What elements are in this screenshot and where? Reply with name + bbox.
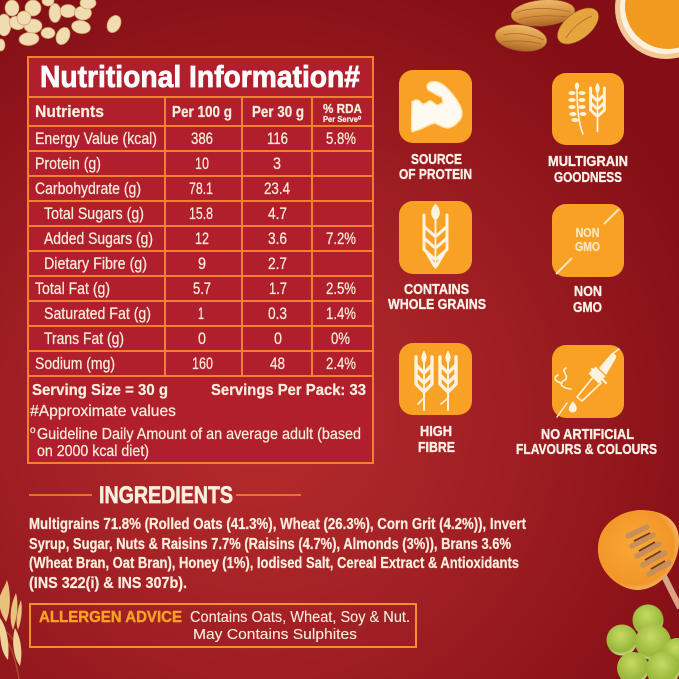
badge: non gmo: GMO: [573, 300, 602, 316]
table rows: 2.5%: [326, 280, 356, 298]
table rows: 78.1: [189, 180, 213, 198]
column headers: [35, 101, 363, 124]
table rows: 0.3: [268, 305, 287, 323]
badge: source of protein: [399, 70, 472, 183]
icon: non gmo mark: [556, 209, 619, 274]
column headers: Per Serve⁰: [323, 115, 362, 124]
table rows: 1.4%: [326, 305, 356, 323]
honey jar, top right: [615, 0, 679, 59]
icon: flexed arm: [412, 82, 462, 132]
column headers: Per 100 g: [172, 104, 232, 121]
allergen heading: ALLERGEN ADVICE: [39, 609, 182, 626]
table rows: Protein (g): [35, 155, 101, 173]
table rows: 5.8%: [326, 130, 356, 148]
table footnotes: Serving Size = 30 g: [32, 382, 168, 399]
table rows: 10: [195, 155, 209, 173]
ingredients text: (INS 322(i) & INS 307b).: [29, 575, 187, 592]
ingredients text: Syrup, Sugar, Nuts & Raisins 7.7% (Raisins (4.7%), Almonds (3%)), Brans 3.6%: [29, 536, 511, 553]
nutrition table: [28, 57, 373, 463]
table rows: 5.7: [193, 280, 211, 298]
table rows: Energy Value (kcal): [35, 130, 157, 148]
ingredients text: (Wheat Bran, Oat Bran), Honey (1%), Iodised Salt, Cereal Extract & Antioxidants: [29, 555, 519, 572]
icon: non gmo mark: GMO: [575, 240, 600, 254]
table footnotes: Servings Per Pack: 33: [211, 382, 366, 399]
badge: source of protein: OF PROTEIN: [399, 167, 472, 183]
table rows: 9: [198, 255, 206, 273]
table rows: 0: [198, 330, 206, 348]
oats pile, top left: [0, 0, 124, 51]
badge: non gmo: [552, 204, 624, 316]
table rows: 386: [191, 130, 213, 148]
badge: high fibre: [399, 343, 472, 456]
label: MULTIGRAIN: [548, 154, 628, 170]
table rows: 2.4%: [326, 355, 356, 373]
badge: multigrain goodness: GOODNESS: [554, 170, 622, 186]
table rows: 12: [195, 230, 209, 248]
dipper head: [628, 527, 669, 574]
label: NO ARTIFICIAL: [541, 427, 634, 443]
table rows: Carbohydrate (g): [35, 180, 141, 198]
column headers: % RDA: [323, 101, 363, 116]
grapes, bottom right: [606, 604, 679, 679]
allergen advice box: [30, 604, 416, 647]
table rows: Added Sugars (g): [44, 230, 153, 248]
label: NON: [574, 284, 602, 300]
table rows: 23.4: [264, 180, 290, 198]
table footnotes: Guideline Daily Amount of an average adult (based: [37, 426, 361, 443]
honey dollop with dipper: [598, 510, 679, 608]
icon: non gmo mark: NON: [576, 226, 600, 240]
table panel: [28, 57, 373, 463]
table rows: 1: [198, 305, 204, 323]
dipper handle: [664, 576, 679, 608]
icon: wheat ear: [424, 204, 447, 268]
table rows: Sodium (mg): [35, 355, 115, 373]
label: CONTAINS: [404, 282, 469, 298]
table rows: 7.2%: [326, 230, 356, 248]
table title: Nutritional Information#: [40, 59, 360, 94]
label: HIGH: [420, 424, 452, 440]
table rows: 4.7: [268, 205, 287, 223]
table rows: 3.6: [268, 230, 287, 248]
table rows: Trans Fat (g): [44, 330, 124, 348]
table rows: Dietary Fibre (g): [44, 255, 147, 273]
table rows: 2.7: [268, 255, 287, 273]
table footnotes: o: [30, 425, 36, 436]
allergen text: Contains Oats, Wheat, Soy & Nut.: [190, 609, 410, 626]
table rows: 0: [274, 330, 282, 348]
ingredients text: [29, 516, 526, 592]
table rows: 116: [267, 130, 288, 148]
table rows: 160: [192, 355, 213, 373]
allergen advice box: May Contains Sulphites: [193, 626, 357, 643]
table footnotes: on 2000 kcal diet): [37, 443, 149, 460]
ingredients heading: INGREDIENTS: [99, 482, 233, 509]
column headers: Per 30 g: [252, 104, 304, 121]
badge: contains whole grains: [388, 201, 486, 313]
table rows: 48: [270, 355, 285, 373]
badge: high fibre: FIBRE: [418, 440, 455, 456]
icon: two grain ears: [568, 82, 604, 134]
badge: no artificial flavours and colours: [516, 345, 657, 458]
table rows: Total Fat (g): [35, 280, 110, 298]
table rows: 15.8: [189, 205, 213, 223]
wheat stalk, bottom left: [0, 580, 22, 679]
column headers: Nutrients: [35, 102, 104, 121]
table grid: [28, 97, 373, 376]
badge: contains whole grains: WHOLE GRAINS: [388, 297, 486, 313]
ingredients text: Multigrains 71.8% (Rolled Oats (41.3%), Wheat (26.3%), Corn Grit (4.2%)), Invert: [29, 516, 526, 533]
table rows: 0%: [331, 330, 350, 348]
label: SOURCE: [411, 152, 462, 168]
table rows: [35, 130, 356, 373]
table rows: Total Sugars (g): [44, 205, 144, 223]
icon: two wheat stalks: [416, 351, 456, 410]
badge: multigrain goodness: [548, 73, 628, 186]
almonds, top right: [493, 0, 605, 54]
table rows: 1.7: [269, 280, 287, 298]
table rows: Saturated Fat (g): [44, 305, 151, 323]
table footnotes: #Approximate values: [30, 403, 176, 420]
table footnotes: [30, 382, 366, 460]
icon: dropper: [555, 349, 619, 417]
table rows: 3: [273, 155, 281, 173]
